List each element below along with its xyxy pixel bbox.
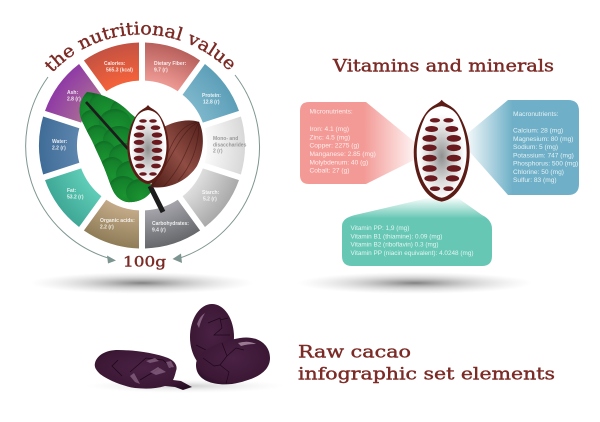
nutritional value wheel — [26, 28, 258, 263]
callout: macronutrients: Sulfur: 83 (mg) — [513, 177, 557, 184]
callout: macronutrients: Calcium: 28 (mg) — [513, 128, 563, 134]
label: dietary fiber: Dietary Fiber: — [154, 61, 186, 67]
heading: vitamins and minerals: Vitamins and minerals — [332, 56, 554, 76]
icon: cacao leaf — [80, 92, 151, 202]
icon: broken cacao bean — [95, 350, 192, 390]
callout: micronutrients: Manganese: 2.85 (mg) — [310, 151, 376, 158]
heading: raw cacao infographic set elements: Raw cacao — [298, 342, 411, 362]
label: ash: 2.8 (г) — [67, 96, 81, 102]
segment: ash — [45, 58, 108, 126]
ring arc: right with arrow — [172, 75, 260, 263]
label: carbohydrates: 9.4 (г) — [152, 227, 166, 233]
label: fat: Fat: — [67, 188, 76, 194]
label: starch: 5.2 (г) — [203, 196, 217, 202]
callout: vitamins: Vitamin B1 (thiamine): 0.09 (mg) — [350, 233, 442, 240]
shadow: under beans — [85, 379, 285, 393]
label: water: Water: — [52, 139, 67, 145]
callout: micronutrients: Copper: 2275 (g) — [310, 143, 359, 150]
label: calories: 565.3 (kcal) — [106, 67, 133, 73]
label: protein: Protein: — [202, 93, 221, 99]
label: dietary fiber: 9.7 (г) — [154, 67, 168, 73]
ring arc: left with arrow — [26, 77, 116, 264]
label: mono- and disaccharides: disaccharides — [213, 142, 247, 148]
callout: macronutrients: Chlorine: 50 (mg) — [513, 169, 564, 176]
segment: organic acids — [84, 200, 139, 248]
icon: pod stalk — [150, 186, 163, 212]
callout: micronutrients: Molybdenum: 40 (g) — [310, 159, 368, 166]
heading: raw cacao infographic set elements: infographic set elements — [298, 364, 555, 384]
label: water: 2.2 (г) — [52, 145, 66, 151]
icon: whole brown cacao pod — [150, 120, 203, 188]
label: ash: Ash: — [67, 90, 78, 96]
callout: micronutrients: Zinc: 4.5 (mg) — [310, 134, 350, 141]
segment: dietary fiber — [145, 43, 200, 91]
wheel labels — [52, 61, 247, 233]
icon: halved cacao pod in wheel — [127, 105, 169, 184]
segment: mono- and disaccharides — [195, 117, 258, 184]
label: organic acids: Organic acids: — [100, 218, 135, 224]
callout: vitamins: Vitamin PP: 1,9 (mg) — [350, 225, 409, 232]
callout: macronutrients: Magnesium: 80 (mg) — [513, 136, 573, 143]
shadow: under pod callouts — [297, 272, 533, 294]
icon: leaf midrib — [86, 102, 128, 149]
label: organic acids: 2.2 (г) — [100, 224, 114, 230]
label: fat: 53.2 (г) — [67, 194, 84, 200]
callout: micronutrients: Iron: 4.1 (mg) — [310, 126, 349, 133]
callout: micronutrients: Micronutrients: — [310, 108, 353, 116]
callout: macronutrients — [468, 100, 579, 195]
callout: macronutrients: Potassium: 747 (mg) — [513, 152, 574, 159]
callout: vitamins: Vitamin PP (niacin equivalent): 4.0248 (mg) — [350, 250, 474, 257]
label: carbohydrates: Carbohydrates: — [152, 221, 189, 227]
heading: raw cacao infographic set elements — [298, 342, 555, 384]
shadow: under wheel — [30, 272, 254, 294]
segment: water — [26, 107, 89, 174]
icon: halved cacao pod, centre — [414, 100, 470, 202]
label: calories: Calories: — [104, 61, 125, 67]
label: starch: Starch: — [202, 190, 219, 196]
callout: vitamins: Vitamin B2 (riboflavin) 0.3 (mg) — [350, 242, 438, 249]
callout: micronutrients: Cobalt: 27 (g) — [310, 168, 349, 175]
segment: calories — [84, 28, 157, 100]
icon: lying cacao bean — [196, 337, 270, 384]
label: protein: 12.8 (г) — [203, 99, 220, 105]
segment: carbohydrates — [127, 191, 200, 263]
callout: macronutrients: Macronutrients: — [513, 111, 559, 118]
callout: macronutrients: Phosphorus: 500 (mg) — [513, 161, 578, 168]
label: mono- and disaccharides: 2 (г) — [213, 149, 223, 155]
segment: starch — [176, 165, 239, 233]
segment: protein — [176, 64, 250, 136]
label: 100g: 100g — [123, 254, 166, 270]
title: the nutritional value: the nutritional value — [44, 22, 234, 72]
callout: vitamins — [342, 198, 492, 266]
callout: micronutrients — [300, 102, 416, 184]
icon: upright cacao bean — [190, 304, 234, 370]
segment: fat — [34, 155, 108, 227]
label: mono- and disaccharides: Mono- and — [213, 136, 238, 142]
callout: macronutrients: Sodium: 5 (mg) — [513, 144, 558, 151]
